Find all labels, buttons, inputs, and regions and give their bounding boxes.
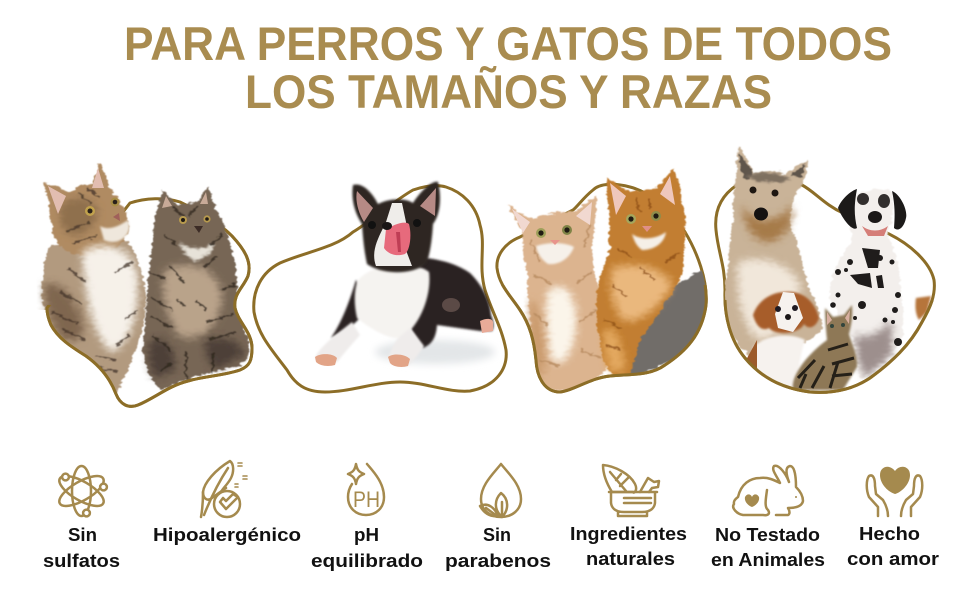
feature: sin parabenos: parabenos [445, 550, 551, 571]
panel: three dogs and a bengal cat [716, 148, 934, 392]
cat: left tabby [42, 162, 146, 394]
label: Sin [68, 524, 97, 545]
label: Ingredientes [570, 523, 687, 544]
icon: atom [55, 466, 108, 516]
panel: orange kittens [497, 168, 709, 392]
icon: drop with leaves [480, 464, 521, 517]
label: Hecho [859, 523, 920, 544]
feature: ingredientes naturales [570, 465, 687, 569]
panel: boston terrier [254, 182, 506, 392]
feature: pH equilibrado: equilibrado [311, 550, 423, 571]
title [124, 17, 892, 118]
dogs: clipped group [725, 148, 931, 390]
cat: right tabby [143, 187, 250, 390]
icon: feather with check [201, 461, 247, 517]
icon: mortar and leaf [603, 465, 659, 516]
label: pH [354, 524, 379, 545]
label: Hipoalergénico [153, 524, 301, 545]
dog: dalmatian [829, 189, 903, 380]
feature: ingredientes naturales: naturales [586, 548, 675, 569]
feature: hecho con amor: con amor [847, 548, 939, 569]
dog: small dog at edge [915, 296, 931, 320]
label: No Testado [715, 524, 820, 545]
kitten faces [512, 176, 675, 264]
panel: two tabby cats [42, 162, 252, 406]
icon: rabbit with heart [733, 466, 803, 515]
feature: sin sulfatos: sulfatos [43, 550, 120, 571]
feature: sin parabenos [445, 464, 551, 571]
icon: hands with heart [867, 467, 922, 516]
feature: hipoalergenico [153, 461, 301, 545]
cat: bengal kitten [793, 305, 857, 390]
blob outline 2 [254, 186, 506, 392]
label: Sin [483, 524, 511, 545]
feature: pH equilibrado [311, 464, 423, 571]
dalmatian details [750, 186, 906, 346]
blob outline 3 [497, 184, 706, 392]
cat faces [48, 168, 211, 242]
dog: shaggy terrier [725, 148, 823, 356]
blob outline 4 [716, 185, 934, 392]
dog: boston terrier [315, 182, 493, 367]
dog: cavalier spaniel [746, 292, 819, 390]
cat: gray cat behind [630, 270, 705, 373]
cats: clipped group [507, 168, 709, 392]
title: PARA PERROS Y GATOS DE TODOS [124, 17, 892, 70]
feature: no testado en animales [711, 466, 825, 570]
cat: light orange kitten [507, 195, 607, 392]
feature: no testado en animales: en Animales [711, 549, 825, 570]
cat: ginger kitten [596, 168, 685, 375]
blob outline 1 [47, 199, 252, 406]
dog: floor shadow [375, 340, 495, 364]
feature: sin sulfatos [43, 466, 120, 571]
cats: clipped group [42, 162, 250, 394]
feature: hecho con amor [847, 467, 939, 569]
title: LOS TAMAÑOS Y RAZAS [245, 65, 772, 118]
icon: drop with pH: PH [353, 487, 380, 512]
